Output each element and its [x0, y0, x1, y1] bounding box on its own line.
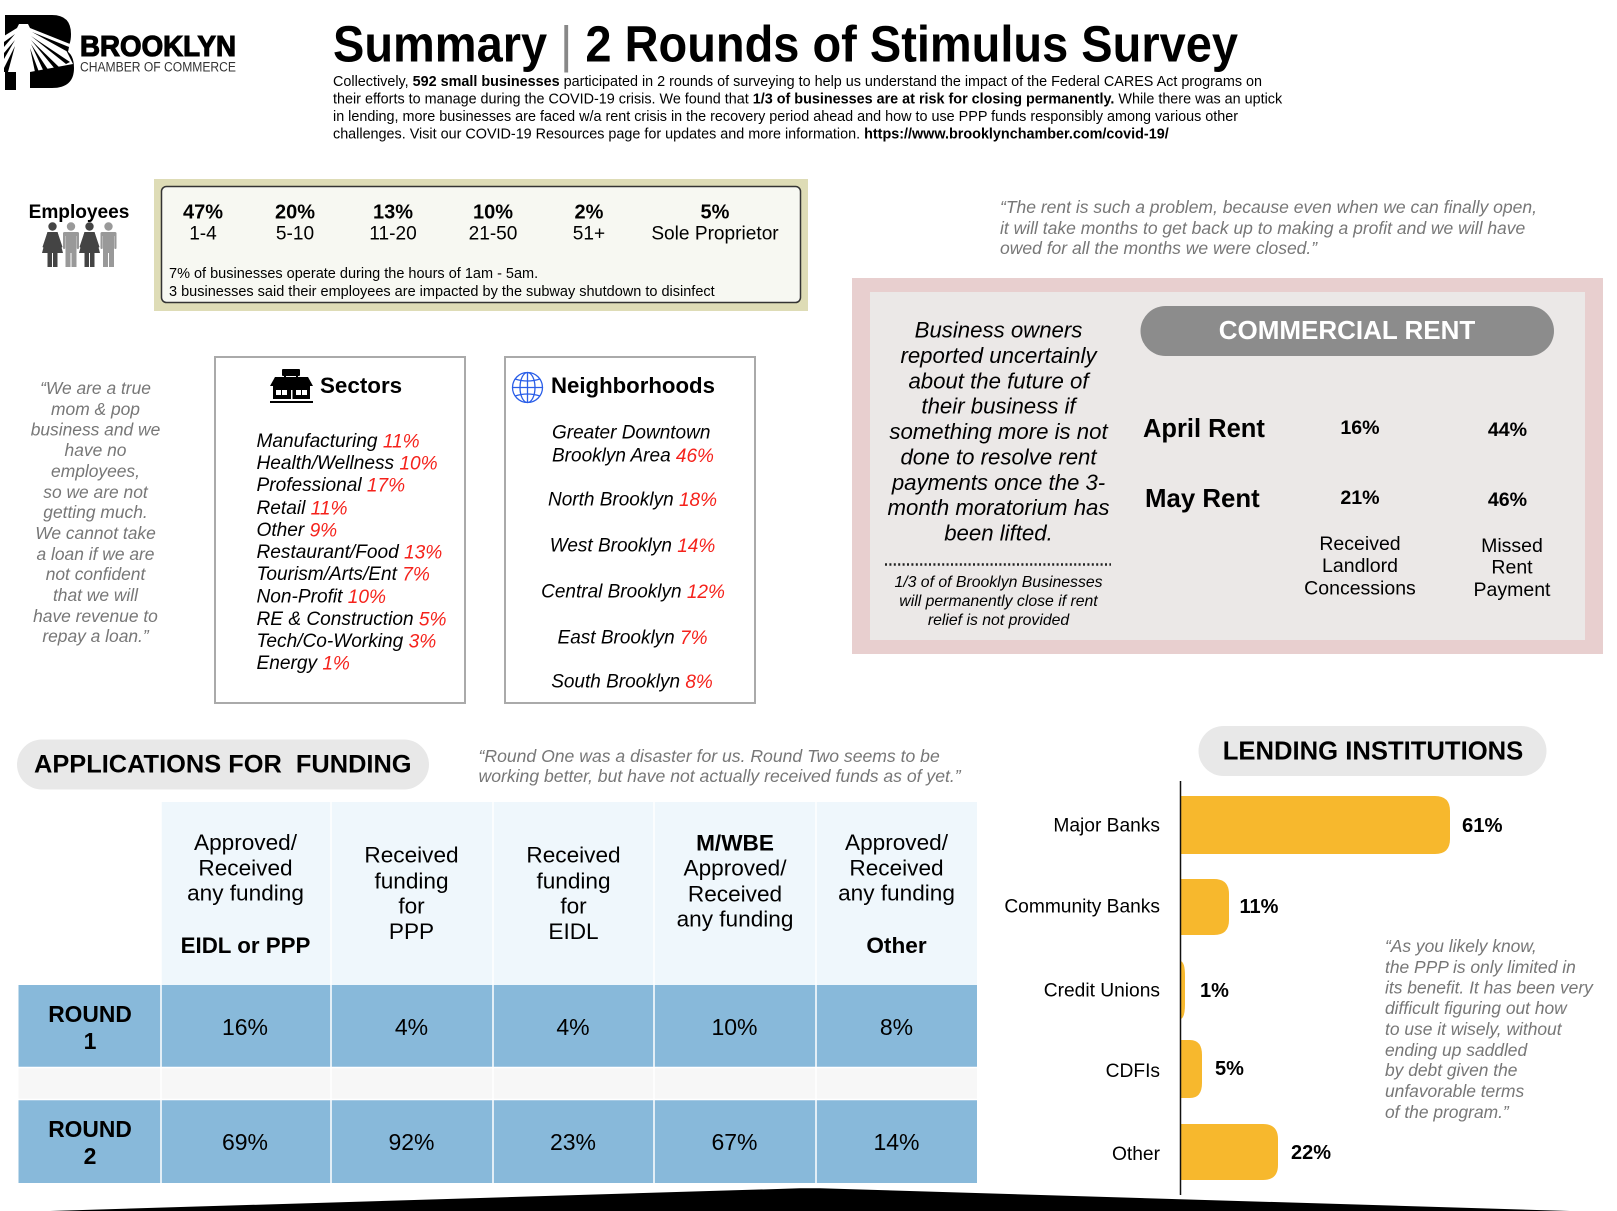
column label: missed rent payment: Payment [1474, 579, 1551, 601]
stat: 5-10 employees: 20% [275, 202, 315, 224]
rent uncertainty statement: about the future of [908, 368, 1091, 394]
stat: 51+ employees: 2% [575, 202, 604, 224]
column header: EIDL: for [560, 894, 587, 918]
row: round 2: 23% [550, 1129, 596, 1155]
rent closure note [894, 574, 1103, 629]
sectors list [256, 431, 446, 674]
logo subtitle: CHAMBER OF COMMERCE [80, 60, 236, 74]
neighborhoods list [541, 422, 725, 692]
bar: CDFIs [1106, 1040, 1244, 1098]
row: round 1: 8% [880, 1014, 913, 1040]
stat: 51+ employees: 51+ [573, 224, 605, 244]
stat: sole proprietor: Sole Proprietor [651, 224, 779, 244]
row: May rent: May Rent [1145, 485, 1260, 513]
intro text block: in lending, more businesses are faced w/a rent crisis in the recovery period ahead and how to use PPP funds responsibly among various other [333, 109, 1238, 125]
bar: credit unions [1044, 961, 1229, 1019]
row: April rent: April Rent [1143, 415, 1265, 443]
quote: true mom and pop: not confident [46, 564, 146, 584]
column header: EIDL or PPP: Approved/ [194, 830, 298, 855]
panel: neighborhoods [505, 357, 755, 703]
column header: Other: any funding [838, 880, 955, 906]
column header: EIDL: funding [536, 868, 611, 894]
sectors list: RE & Construction 5% [256, 609, 446, 630]
bottom black peak shape [50, 1188, 1570, 1211]
column header: EIDL: Received [526, 842, 621, 868]
column header: PPP [364, 842, 459, 944]
column header: EIDL [526, 842, 621, 944]
column label: received landlord concessions: Concessions [1304, 578, 1416, 600]
quote: true mom and pop: have no [65, 440, 127, 460]
bar: other: 22% [1291, 1142, 1331, 1164]
quote: PPP limited in benefit: ending up saddled [1385, 1040, 1528, 1060]
rent uncertainty statement [888, 318, 1109, 546]
quote: PPP limited in benefit: to use it wisely, without [1385, 1019, 1563, 1039]
row: round 2: 14% [873, 1129, 920, 1155]
quote: rent problem: owed for all the months we were closed.” [1000, 238, 1318, 258]
commercial rent pill heading: COMMERCIAL RENT [1219, 315, 1475, 345]
title: Summary | 2 Rounds of Stimulus Survey [333, 16, 1239, 72]
stat: 1-4 employees: 47% [183, 202, 223, 224]
stat: 1-4 employees: 1-4 [189, 224, 217, 244]
quote: PPP limited in benefit: of the program.” [1385, 1102, 1510, 1122]
employee footnotes [169, 266, 715, 300]
employees label: Employees [29, 202, 129, 223]
stat: 11-20 employees: 11-20 [369, 224, 417, 244]
row: round 2: 69% [222, 1129, 268, 1155]
quote: PPP limited in benefit: the PPP is only limited in [1385, 957, 1576, 977]
icon: four people [42, 222, 116, 267]
icon: globe [512, 372, 542, 402]
quote: true mom and pop: have revenue to [33, 606, 158, 626]
sectors list: Restaurant/Food 13% [256, 542, 442, 563]
row: May rent: 21% [1340, 487, 1380, 509]
rent closure note: will permanently close if rent [899, 593, 1098, 610]
rent uncertainty statement: their business if [921, 394, 1078, 418]
applications for funding pill heading [17, 740, 429, 790]
rent uncertainty statement: done to resolve rent [900, 444, 1097, 470]
panel: employee statistics [154, 179, 808, 311]
column header: M/WBE: M/WBE [696, 830, 774, 856]
bar: major banks [1053, 796, 1503, 854]
column header: PPP: for [398, 894, 425, 918]
column label: missed rent payment [1474, 535, 1551, 601]
quote: rent problem: “The rent is such a problem, because even when we can finally open, [1000, 197, 1537, 217]
neighborhoods list: Greater Downtown [552, 422, 710, 444]
quote: true mom and pop: that we will [53, 585, 139, 605]
row: round 1: ROUND [48, 1001, 132, 1027]
bar: major banks: 61% [1462, 815, 1503, 837]
quote: PPP limited in benefit: its benefit. It has been very [1385, 978, 1594, 998]
bar: credit unions: 1% [1200, 980, 1229, 1002]
neighborhoods list: West Brooklyn 14% [550, 536, 715, 556]
quote: true mom and pop: mom & pop [51, 399, 140, 419]
panel: sectors [215, 357, 465, 703]
stat: sole proprietor [651, 202, 779, 244]
column header: PPP: Received [364, 842, 459, 868]
quote: round one disaster [478, 746, 962, 786]
quote: PPP limited in benefit: by debt given the [1385, 1060, 1518, 1080]
applications for funding pill heading: APPLICATIONS FOR FUNDING [34, 750, 412, 778]
table backgrounds [18, 802, 977, 1183]
row: round 2: ROUND [48, 1116, 132, 1142]
column header: EIDL or PPP: Received [198, 856, 293, 880]
quote: true mom and pop: repay a loan.” [42, 626, 150, 646]
rent uncertainty statement: payments once the 3- [891, 470, 1105, 495]
logo: Brooklyn Chamber of Commerce [4, 15, 236, 90]
row: May rent: 46% [1488, 489, 1527, 511]
quote: true mom and pop: We cannot take [35, 523, 156, 543]
column header: M/WBE: Approved/ [684, 856, 787, 880]
column header: Other: Received [849, 856, 944, 880]
icon: storefront [270, 369, 313, 403]
neighborhoods heading: Neighborhoods [551, 373, 715, 398]
row: round 2: 92% [388, 1129, 435, 1155]
row: round 1: 4% [556, 1014, 590, 1040]
stat: sole proprietor: 5% [701, 202, 730, 224]
column header: M/WBE [677, 830, 793, 932]
column header: EIDL: EIDL [548, 919, 599, 944]
neighborhoods list: Central Brooklyn 12% [541, 582, 725, 602]
column header: EIDL or PPP: EIDL or PPP [181, 933, 310, 958]
quote: true mom and pop: “We are a true [40, 378, 151, 398]
column label: missed rent payment: Missed [1481, 535, 1543, 557]
sectors list: Other 9% [256, 520, 337, 541]
column header: Other: Approved/ [845, 830, 949, 855]
bar: other: Other [1112, 1144, 1161, 1165]
quote: true mom and pop: so we are not [43, 482, 149, 502]
quote: PPP limited in benefit: unfavorable terms [1385, 1081, 1524, 1101]
quote: true mom and pop: business and we [31, 420, 161, 440]
rent uncertainty statement: reported uncertainly [900, 343, 1098, 368]
row: round 2: 2 [84, 1143, 96, 1169]
column label: received landlord concessions [1304, 533, 1416, 600]
column header: M/WBE: any funding [677, 906, 793, 932]
column header: Other [838, 830, 955, 958]
quote: true mom and pop [31, 378, 161, 646]
row: round 1: 4% [395, 1014, 428, 1040]
quote: PPP limited in benefit [1385, 936, 1594, 1122]
logo wordmark: BROOKLYN [80, 31, 236, 63]
quote: PPP limited in benefit: difficult figuring out how [1385, 998, 1568, 1018]
employee footnotes: 3 businesses said their employees are impacted by the subway shutdown to disinfect [169, 284, 715, 300]
stat: 21-50 employees: 10% [473, 202, 513, 224]
neighborhoods list: Brooklyn Area 46% [552, 446, 714, 466]
bar: community banks: 11% [1240, 896, 1279, 918]
lending institutions pill heading: LENDING INSTITUTIONS [1223, 738, 1523, 766]
rent uncertainty statement: month moratorium has [888, 495, 1109, 520]
bar: credit unions: Credit Unions [1044, 980, 1160, 1002]
stat: 5-10 employees [275, 202, 315, 244]
intro text block: Collectively, 592 small businesses participated in 2 rounds of surveying to help us understand the impact of the Federal CARES Act programs on [333, 74, 1262, 90]
rent closure note: 1/3 of of Brooklyn Businesses [894, 574, 1103, 591]
row: round 1 [48, 1001, 913, 1054]
stat: 21-50 employees [469, 202, 517, 244]
column header: Other: Other [866, 933, 927, 958]
row: round 1: 1 [84, 1028, 97, 1054]
bar: community banks: Community Banks [1004, 896, 1160, 918]
intro text block: their efforts to manage during the COVID-19 crisis. We found that 1/3 of businesses are at risk for closing permanently. While there was an uptick [333, 92, 1283, 108]
row: April rent: 44% [1488, 419, 1527, 441]
quote: round one disaster: working better, but have not actually received funds as of yet.” [478, 766, 962, 786]
row: April rent: 16% [1340, 417, 1380, 439]
column header: EIDL or PPP [181, 830, 310, 958]
bar: CDFIs: CDFIs [1106, 1061, 1160, 1082]
intro text block: challenges. Visit our COVID-19 Resources page for updates and more information. https://www.brooklynchamber.com/covid-19/ [333, 126, 1169, 142]
intro text block [333, 74, 1283, 142]
rent uncertainty statement: something more is not [889, 419, 1108, 444]
column label: received landlord concessions: Received [1319, 533, 1401, 555]
bar: CDFIs: 5% [1215, 1058, 1244, 1080]
row: round 2 [48, 1116, 920, 1169]
rent closure note: relief is not provided [928, 612, 1070, 629]
stat: 1-4 employees [183, 202, 223, 244]
sectors heading: Sectors [320, 373, 402, 398]
neighborhoods list: North Brooklyn 18% [548, 490, 717, 510]
neighborhoods list: East Brooklyn 7% [558, 628, 708, 648]
column header: EIDL or PPP: any funding [187, 880, 304, 906]
sectors list: Health/Wellness 10% [256, 453, 438, 474]
rent uncertainty statement: been lifted. [944, 520, 1053, 546]
bar: other [1112, 1124, 1331, 1180]
employee footnotes: 7% of businesses operate during the hours of 1am - 5am. [169, 266, 538, 282]
quote: true mom and pop: getting much. [43, 502, 148, 522]
neighborhoods list: South Brooklyn 8% [551, 672, 713, 692]
column header: PPP: PPP [389, 919, 434, 944]
stat: 11-20 employees [369, 202, 417, 244]
bar chart: lending institutions [1004, 781, 1503, 1195]
column header: M/WBE: Received [688, 882, 782, 906]
quote: round one disaster: “Round One was a disaster for us. Round Two seems to be [478, 746, 940, 766]
quote: true mom and pop: a loan if we are [37, 544, 155, 564]
row: round 2: 67% [711, 1129, 758, 1155]
rent uncertainty statement: Business owners [915, 318, 1082, 342]
stat: 11-20 employees: 13% [373, 202, 413, 224]
quote: rent problem: it will take months to get back up to making a profit and we will have [1000, 218, 1526, 238]
icon: bridge B mark [4, 15, 74, 90]
quote: true mom and pop: employees, [51, 461, 140, 481]
employees heading with icon [29, 202, 129, 267]
column header: PPP: funding [374, 868, 449, 894]
sectors list: Retail 11% [256, 498, 347, 519]
sectors list: Manufacturing 11% [256, 431, 420, 452]
table: applications for funding [18, 802, 977, 1183]
row: May rent [1145, 485, 1527, 513]
column label: missed rent payment: Rent [1491, 556, 1533, 578]
commercial rent pill heading [1140, 306, 1554, 356]
row: round 1: 10% [711, 1014, 758, 1040]
bar: major banks: Major Banks [1053, 816, 1160, 836]
quote: rent problem [1000, 197, 1537, 258]
row: round 1: 16% [222, 1014, 268, 1040]
row: April rent [1143, 415, 1527, 443]
sectors list: Tech/Co-Working 3% [256, 631, 436, 652]
lending institutions pill heading [1198, 726, 1546, 776]
column label: received landlord concessions: Landlord [1322, 555, 1398, 577]
stat: 51+ employees [573, 202, 605, 244]
stat: 21-50 employees: 21-50 [469, 224, 517, 244]
stat: 5-10 employees: 5-10 [276, 224, 314, 244]
sectors list: Tourism/Arts/Ent 7% [256, 564, 430, 585]
panel: commercial rent [852, 278, 1603, 654]
bar: community banks [1004, 879, 1279, 935]
sectors list: Energy 1% [256, 653, 350, 674]
sectors list: Non-Profit 10% [256, 586, 386, 608]
quote: PPP limited in benefit: “As you likely know, [1385, 936, 1537, 956]
sectors list: Professional 17% [256, 475, 405, 496]
